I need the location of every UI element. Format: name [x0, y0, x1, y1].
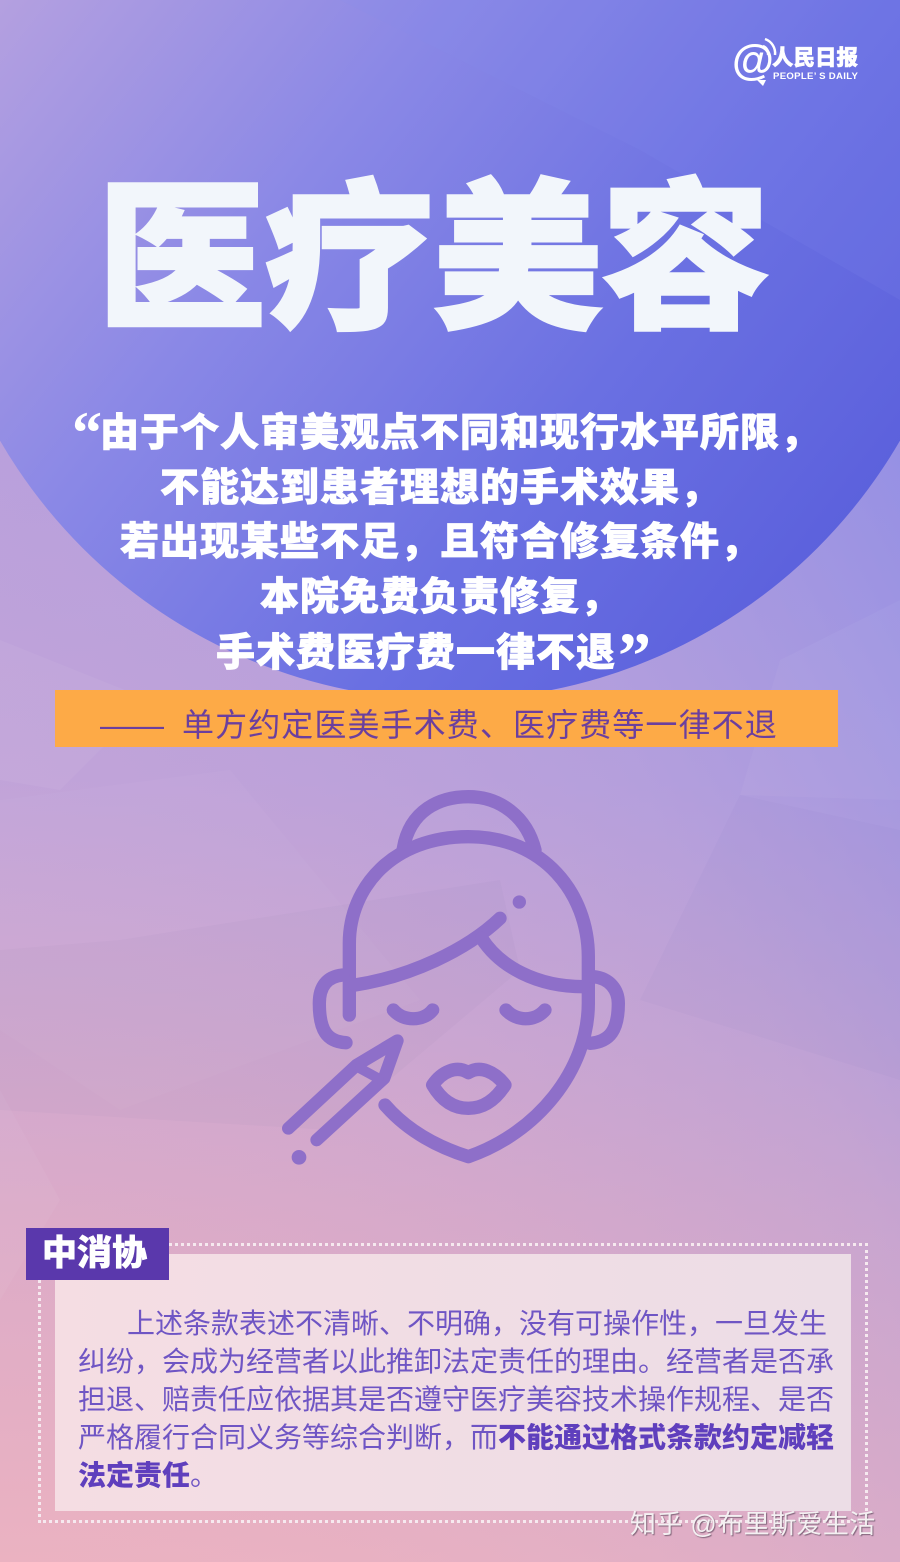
source text: 单方约定医美手术费、医疗费等一律不退 [182, 707, 778, 743]
quote line 3: 若出现某些不足，且符合修复条件， [120, 521, 760, 564]
dotted frame [38, 1243, 868, 1523]
text panel [55, 1254, 851, 1511]
label tab [26, 1228, 169, 1280]
logo: People's Daily [732, 36, 858, 86]
panel: consumer association comment [26, 1228, 868, 1523]
body line 5: 法定责任。 [78, 1460, 218, 1491]
body line 3: 担退、赔责任应依据其是否遵守医疗美容技术操作规程、是否 [78, 1384, 834, 1415]
source dash: —— [100, 707, 164, 743]
watermark: 知乎 @布里斯爱生活 [630, 1509, 876, 1539]
quote line 4: 本院免费负责修复， [260, 576, 620, 619]
label text: 中消协 [42, 1234, 147, 1273]
icon: face with eyebrow pencil [282, 790, 625, 1165]
body line 1: 上述条款表述不清晰、不明确，没有可操作性，一旦发生 [127, 1308, 827, 1339]
logo english: PEOPLE’ S DAILY [773, 71, 858, 82]
quote line 2: 不能达到患者理想的手术效果， [160, 467, 720, 510]
quote line 5: 手术费医疗费一律不退 [216, 632, 616, 675]
quote line 1: 由于个人审美观点不同和现行水平所限， [100, 412, 820, 455]
icon: at sign with signal: @ [732, 36, 774, 84]
title: 医疗美容 [97, 129, 769, 362]
quote block [72, 400, 820, 693]
opening quote mark: “ [72, 400, 102, 466]
body line 4: 严格履行合同义务等综合判断，而不能通过格式条款约定减轻 [78, 1422, 834, 1453]
closing quote mark: ” [618, 620, 651, 693]
logo name: 人民日报 [772, 46, 858, 70]
orange source bar [55, 690, 838, 747]
body line 2: 纠纷，会成为经营者以此推卸法定责任的理由。经营者是否承 [78, 1346, 834, 1377]
